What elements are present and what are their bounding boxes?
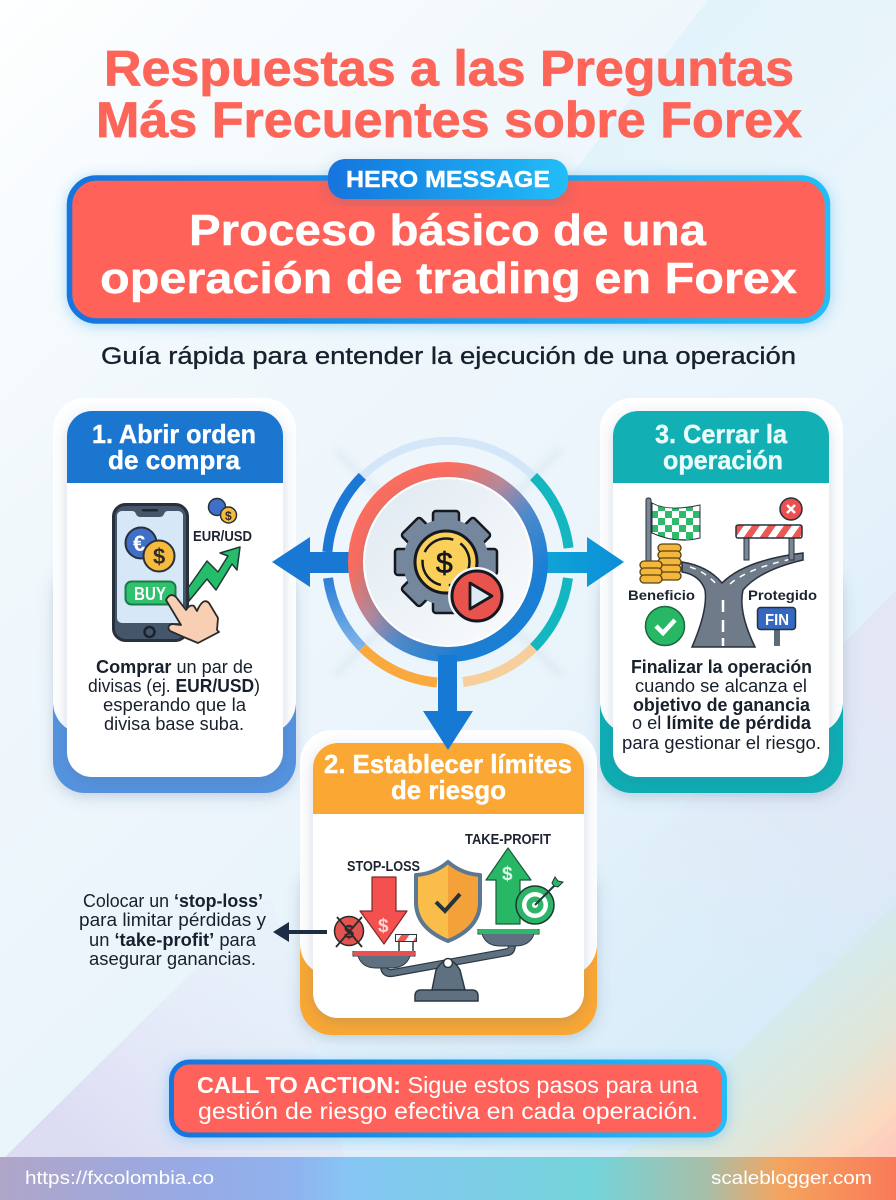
hero badge: HERO MESSAGE <box>346 166 550 192</box>
call to action: gestión de riesgo efectiva en cada operación. <box>198 1098 698 1124</box>
icon: risk scale: $ <box>378 916 389 937</box>
icon: risk scale: STOP-LOSS <box>347 859 420 875</box>
step 3 text: para gestionar el riesgo. <box>622 733 821 753</box>
hub faint diagonals <box>335 449 561 675</box>
call to action: CALL TO ACTION: Sigue estos pasos para una <box>197 1072 698 1098</box>
panel: step 2 establecer limites <box>300 730 597 1035</box>
step 3 header <box>613 411 829 483</box>
step 3 text: objetivo de ganancia <box>633 695 811 715</box>
side text: stop-loss explanation <box>79 891 266 969</box>
icon: risk scale <box>334 832 563 1001</box>
title <box>96 40 802 148</box>
step 1 header <box>67 411 283 483</box>
icon: phone buying EUR/USD <box>114 498 252 643</box>
side text: stop-loss explanation: Colocar un ‘stop-loss’ <box>83 891 263 911</box>
footer: scaleblogger.com <box>711 1167 872 1188</box>
hero heading: Proceso básico de una <box>189 207 707 255</box>
footer <box>0 1157 896 1200</box>
arrow to side text <box>273 922 327 942</box>
icon: road fork with flag and barrier: FIN <box>765 612 789 629</box>
hero heading <box>100 207 797 303</box>
step 3 header: 3. Cerrar la <box>655 419 788 449</box>
arrow to step 3 <box>544 537 624 587</box>
hub inner disc <box>364 478 532 646</box>
step 1 text: esperando que la <box>103 695 247 715</box>
step 2 header: de riesgo <box>391 775 506 805</box>
icon: phone buying EUR/USD: $ <box>153 544 165 569</box>
step 2 header <box>313 743 584 814</box>
step 3 header: operación <box>663 445 783 475</box>
icon: road fork with flag and barrier <box>628 498 817 647</box>
icon: phone buying EUR/USD: € <box>133 531 145 556</box>
step 3 text: cuando se alcanza el <box>635 676 807 696</box>
step 1 header: de compra <box>108 445 241 475</box>
hero heading: operación de trading en Forex <box>100 255 797 303</box>
icon: risk scale: $ <box>344 922 354 942</box>
icon: road fork with flag and barrier: Beneficio <box>628 587 695 603</box>
call to action <box>172 1062 724 1135</box>
title: Más Frecuentes sobre Forex <box>96 91 802 148</box>
icon: risk scale: TAKE-PROFIT <box>465 832 551 848</box>
hub gradient ring <box>356 470 540 654</box>
icon: phone buying EUR/USD: EUR/USD <box>193 528 252 545</box>
step 1 text: divisas (ej. EUR/USD) <box>88 676 260 696</box>
icon: gear with dollar coin and play <box>395 511 506 625</box>
central process hub <box>272 441 624 682</box>
step 1 header: 1. Abrir orden <box>92 419 256 449</box>
arrow to step 2 <box>423 655 473 750</box>
subtitle: Guía rápida para entender la ejecución de una operación <box>101 343 796 370</box>
step 1 text: Comprar un par de <box>96 657 253 677</box>
side text: stop-loss explanation: un ‘take-profit’ para <box>89 930 257 950</box>
icon: risk scale: $ <box>502 864 513 885</box>
side text: stop-loss explanation: para limitar pérdidas y <box>79 910 266 930</box>
hero message banner <box>70 159 828 321</box>
icon: phone buying EUR/USD: $ <box>225 509 232 523</box>
icon: gear with dollar coin and play: $ <box>436 547 453 580</box>
title: Respuestas a las Preguntas <box>104 40 794 96</box>
panel: step 3 cerrar la operacion <box>600 398 843 793</box>
side text: stop-loss explanation: asegurar ganancias. <box>89 949 256 969</box>
hero badge <box>328 159 568 199</box>
step 3 text: o el límite de pérdida <box>632 713 812 733</box>
step 3 text <box>622 657 821 753</box>
step 2 header: 2. Establecer límites <box>324 749 572 779</box>
step 1 text: divisa base suba. <box>104 714 244 734</box>
icon: road fork with flag and barrier: Protegido <box>748 587 817 603</box>
icon: phone buying EUR/USD: BUY <box>134 584 166 604</box>
hub outer ring segments <box>327 441 569 682</box>
footer: https://fxcolombia.co <box>25 1167 214 1188</box>
arrow to step 1 <box>272 537 352 587</box>
step 1 text <box>88 657 260 734</box>
panel: step 1 abrir orden <box>53 398 296 793</box>
step 3 text: Finalizar la operación <box>631 657 812 677</box>
